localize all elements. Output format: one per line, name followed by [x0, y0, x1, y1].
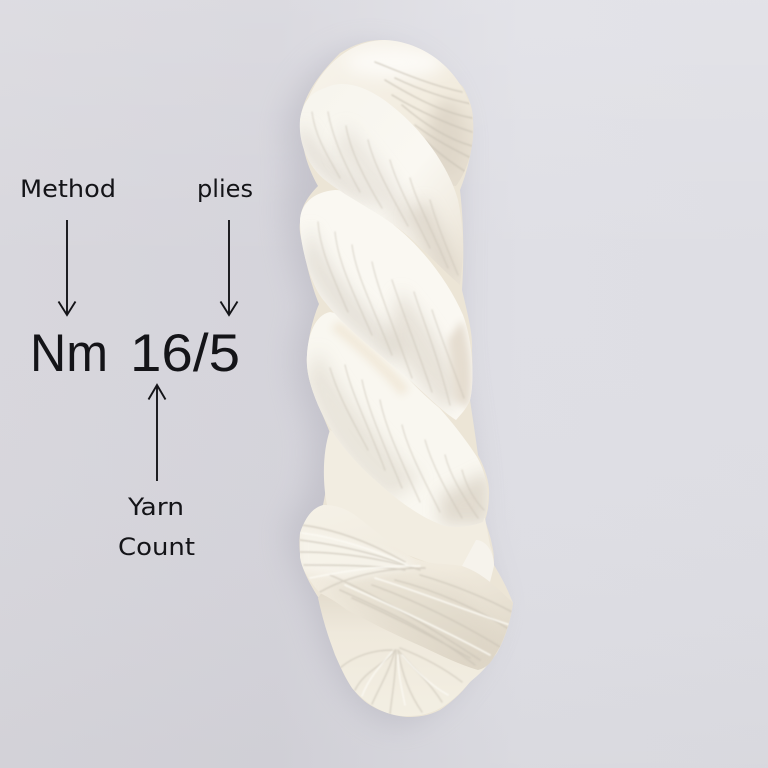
- first twist strand: [300, 84, 462, 276]
- tie wrap band: [300, 505, 512, 670]
- arrow: Yarn Count up to 16: [148, 385, 166, 481]
- label: plies: plies: [197, 175, 253, 203]
- small loop at right of tie: [462, 540, 494, 582]
- label: Yarn Count: [118, 493, 195, 561]
- yarn skein: [286, 35, 517, 724]
- label: Method: Method: [20, 175, 116, 203]
- main notation: 16/5: [130, 324, 240, 383]
- back top loop: [308, 40, 474, 186]
- back strand between twists: [402, 366, 472, 420]
- label: Yarn Count: Yarn: [127, 493, 184, 521]
- skein shadow: [286, 48, 496, 724]
- arrow: Method down to Nm: [58, 220, 76, 315]
- third twist strand: [306, 312, 486, 522]
- skein base silhouette: [299, 40, 513, 717]
- tail ball below tie: [318, 594, 486, 716]
- label: Yarn Count: Count: [118, 533, 195, 561]
- main notation: Nm: [30, 324, 108, 383]
- second twist strand: [295, 185, 477, 423]
- arrow: plies down to 5: [220, 220, 238, 315]
- main notation: [30, 324, 240, 383]
- lower back strand: [324, 430, 493, 578]
